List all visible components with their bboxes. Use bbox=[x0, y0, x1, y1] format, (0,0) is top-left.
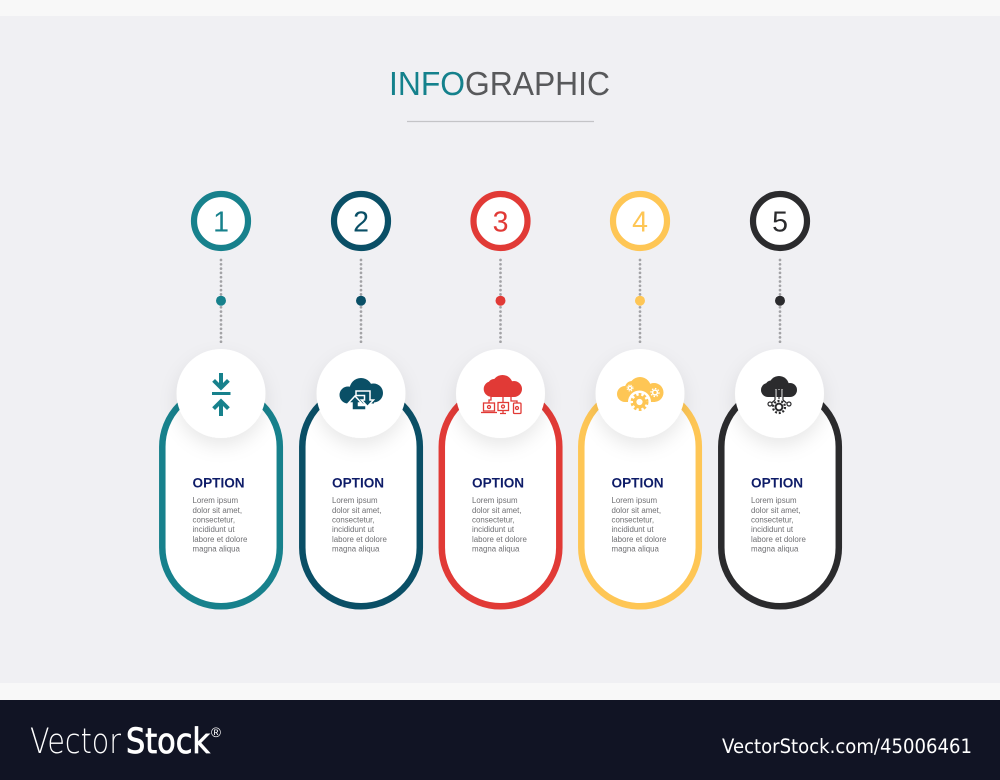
option text 4 bbox=[612, 476, 667, 554]
column 1 bbox=[162, 194, 280, 606]
option text 5: labore et dolore bbox=[751, 535, 806, 544]
number badge 3 bbox=[474, 194, 528, 248]
option text 5 bbox=[751, 476, 806, 554]
icon circle 2 bbox=[316, 349, 406, 438]
option text 5: magna aliqua bbox=[751, 544, 799, 554]
icon circle 1 bbox=[176, 349, 266, 438]
card 4 bbox=[581, 388, 699, 606]
option text 2: consectetur, bbox=[332, 516, 375, 524]
option text 4: labore et dolore bbox=[612, 535, 667, 544]
connector 3 bbox=[496, 260, 506, 342]
option text 3: Lorem ipsum bbox=[472, 496, 518, 505]
footer id: VectorStock.com/45006461 bbox=[722, 735, 972, 758]
option text 3: incididunt ut bbox=[472, 525, 515, 534]
card 2 bbox=[302, 388, 420, 606]
option text 3: labore et dolore bbox=[472, 535, 527, 544]
option text 2: OPTION bbox=[332, 476, 384, 490]
option text 4: dolor sit amet, bbox=[612, 506, 661, 515]
icon: cloud gears bbox=[617, 377, 664, 414]
number badge 5: 5 bbox=[772, 206, 788, 238]
title: INFOGRAPHIC bbox=[389, 65, 610, 102]
icon: cloud sync bbox=[340, 378, 383, 410]
option text 3: dolor sit amet, bbox=[472, 506, 522, 515]
card 3 bbox=[442, 388, 559, 606]
column 3 bbox=[442, 194, 559, 606]
footer logo: ® bbox=[211, 725, 221, 740]
option text 4: consectetur, bbox=[612, 516, 654, 524]
option text 3: OPTION bbox=[472, 476, 524, 490]
number badge 1: 1 bbox=[213, 206, 229, 238]
option text 1: labore et dolore bbox=[192, 535, 248, 544]
option text 2: dolor sit amet, bbox=[332, 506, 382, 515]
column 5 bbox=[721, 194, 839, 606]
option text 1: dolor sit amet, bbox=[192, 506, 242, 515]
option text 4: OPTION bbox=[612, 476, 664, 490]
number badge 2 bbox=[334, 194, 388, 248]
option text 4: Lorem ipsum bbox=[612, 496, 658, 505]
option text 5: Lorem ipsum bbox=[751, 496, 797, 505]
number badge 2: 2 bbox=[353, 206, 369, 238]
icon circle 3 bbox=[456, 349, 545, 438]
card 1 bbox=[162, 388, 280, 606]
footer band bbox=[0, 700, 1000, 780]
connector 5 bbox=[775, 260, 785, 342]
connector 4 bbox=[635, 260, 645, 342]
connector 2 bbox=[356, 260, 366, 342]
connector 1 bbox=[216, 260, 226, 342]
footer logo bbox=[30, 722, 221, 762]
column 2 bbox=[302, 194, 420, 606]
option text 1 bbox=[192, 476, 248, 554]
number badge 1 bbox=[194, 194, 248, 248]
icon: cloud circuit bbox=[761, 376, 797, 413]
option text 3 bbox=[472, 476, 527, 554]
number badge 3: 3 bbox=[493, 206, 508, 238]
option text 1: Lorem ipsum bbox=[192, 496, 239, 505]
option text 5: consectetur, bbox=[751, 516, 794, 524]
option text 1: incididunt ut bbox=[192, 525, 235, 534]
option text 1: consectetur, bbox=[192, 516, 235, 524]
icon: cloud devices bbox=[481, 375, 522, 414]
option text 4: magna aliqua bbox=[612, 544, 659, 554]
option text 2: incididunt ut bbox=[332, 525, 375, 534]
option text 2: labore et dolore bbox=[332, 535, 387, 544]
number badge 5 bbox=[753, 194, 807, 248]
option text 2: magna aliqua bbox=[332, 544, 380, 554]
card 5 bbox=[721, 388, 839, 606]
option text 3: magna aliqua bbox=[472, 544, 520, 554]
option text 1: OPTION bbox=[192, 476, 245, 490]
option text 3: consectetur, bbox=[472, 516, 515, 524]
option text 1: magna aliqua bbox=[192, 544, 240, 554]
footer logo: Stock bbox=[126, 722, 211, 762]
icon circle 4 bbox=[596, 349, 684, 438]
option text 2 bbox=[332, 476, 387, 554]
footer logo: Vector bbox=[30, 722, 121, 762]
number badge 4: 4 bbox=[632, 206, 648, 238]
option text 5: incididunt ut bbox=[751, 525, 794, 534]
icon: compress arrows bbox=[212, 373, 230, 416]
number badge 4 bbox=[613, 194, 667, 248]
column 4 bbox=[581, 194, 699, 606]
option text 5: OPTION bbox=[751, 476, 803, 490]
option text 2: Lorem ipsum bbox=[332, 496, 378, 505]
option text 4: incididunt ut bbox=[612, 525, 654, 534]
icon circle 5 bbox=[735, 349, 824, 438]
option text 5: dolor sit amet, bbox=[751, 506, 801, 515]
